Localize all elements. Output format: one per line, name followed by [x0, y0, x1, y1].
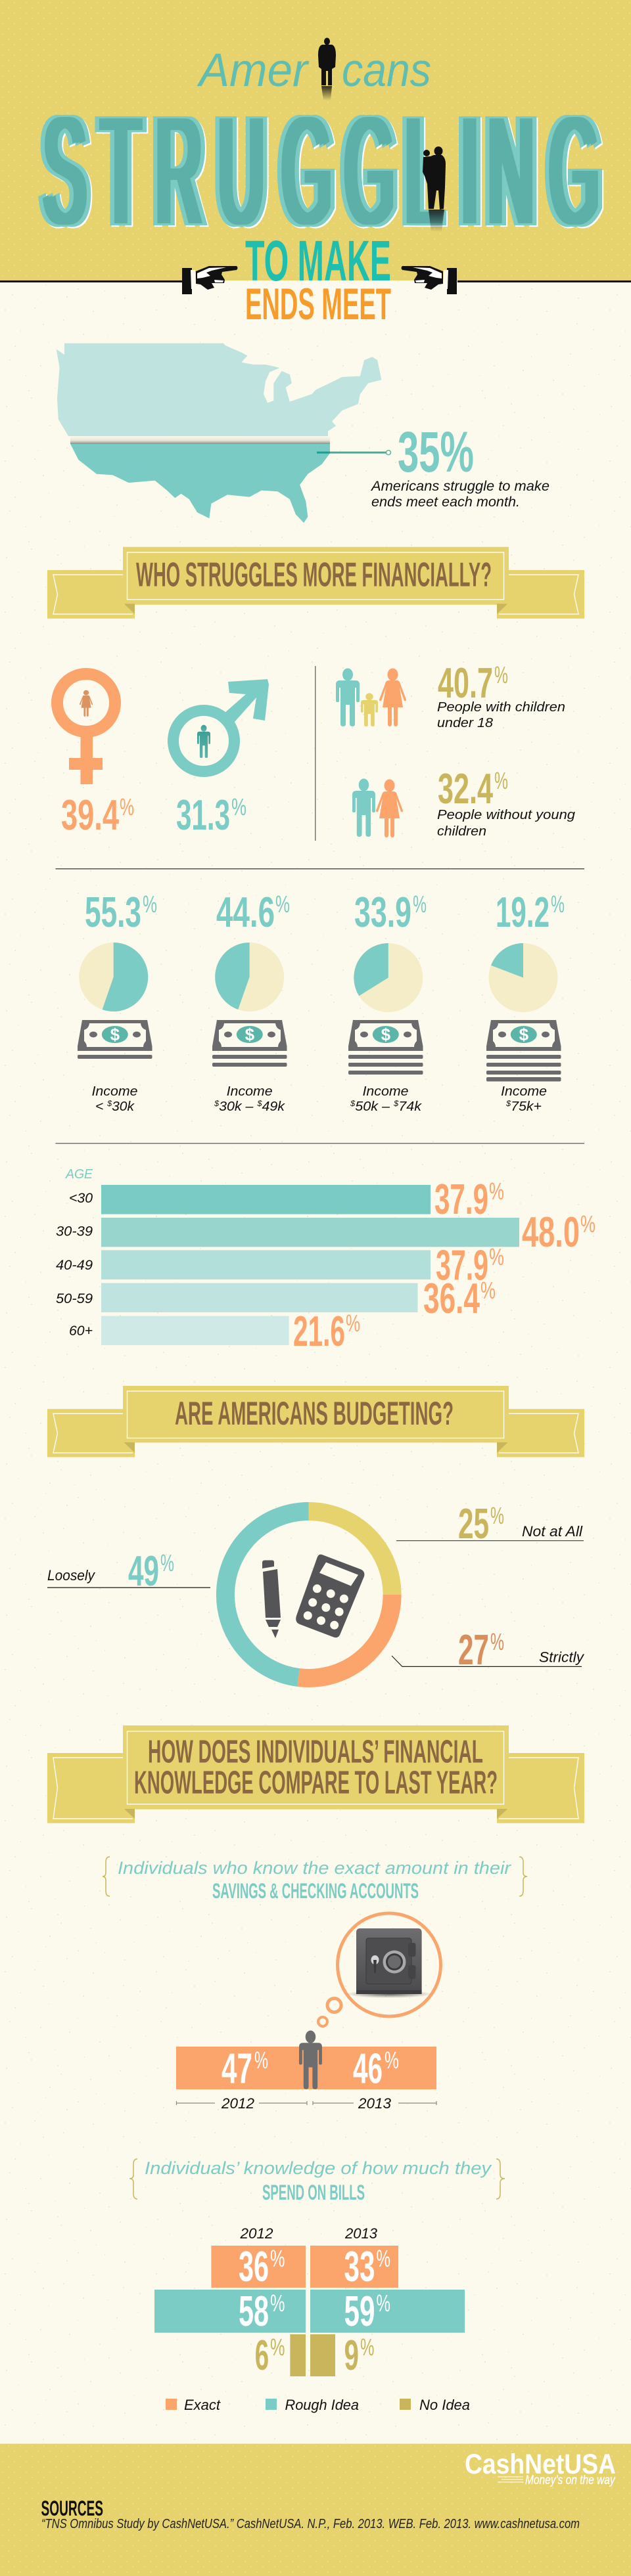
callout: strictly 27%: [392, 1626, 585, 1674]
stat: people with children 40.7%: under 18: [437, 716, 493, 730]
pie chart: [354, 943, 423, 1012]
divider line: [55, 1143, 584, 1144]
row: exact: %: [270, 2245, 285, 2272]
stat: women 39.4%: 39.4: [61, 791, 119, 839]
row: no idea: %: [270, 2334, 285, 2361]
icon: money stack: [212, 1020, 287, 1067]
icon: money stack: [486, 1020, 561, 1081]
sources: [41, 2497, 580, 2531]
title: STRUGGLING: STRUGGLING: [43, 85, 599, 256]
icon: male symbol: [174, 679, 269, 771]
label: Income: [501, 1084, 547, 1099]
bar: 30-39: 48.0: [522, 1208, 580, 1256]
row: rough idea: %: [270, 2290, 285, 2317]
title: ENDS MEET: ENDS MEET: [245, 279, 391, 329]
year labels: [239, 2225, 378, 2242]
label: $: [106, 1099, 112, 1108]
bar: 50-59: %: [480, 1277, 496, 1304]
bar: 30-39: %: [580, 1210, 596, 1237]
stat: 46%: 46: [353, 2044, 383, 2093]
bar: 30-39: [56, 1208, 596, 1256]
icon: female symbol: [57, 674, 115, 784]
banner: who struggles more financially: [47, 547, 584, 619]
icon: person: [299, 2031, 322, 2089]
bar: 60 plus: 60+: [69, 1323, 93, 1339]
label: $: [350, 1099, 356, 1108]
title: Americans: cans: [342, 45, 431, 97]
heading: spend on bills: Individuals’ knowledge of how much they: [145, 2158, 492, 2178]
heading: savings and checking: [103, 1857, 527, 1903]
row: rough idea: %: [376, 2290, 390, 2317]
label: Income: [363, 1084, 409, 1099]
stat: men 31.3%: %: [231, 793, 246, 820]
donut chart: budgeting: [225, 1511, 392, 1678]
label: 75k+: [511, 1099, 542, 1114]
icon: left pointing hand: [182, 266, 238, 294]
pie chart: [79, 943, 148, 1011]
callout: loosely 49%: [47, 1547, 210, 1595]
panel: income 50k to 74k: [348, 888, 427, 1114]
bar: 40-49: %: [489, 1243, 504, 1270]
sources: SOURCES: [41, 2497, 103, 2520]
banner: are Americans budgeting: [47, 1386, 584, 1457]
bar: 40-49: [56, 1241, 504, 1289]
stat: 19.2%: 19.2: [496, 888, 549, 936]
stat: people with children 40.7%: 40.7: [438, 659, 493, 707]
footer band: [0, 2444, 631, 2576]
stat: people without young children 32.4%: %: [494, 767, 508, 794]
stat: 47%: %: [254, 2047, 268, 2074]
row: exact: 33: [344, 2242, 375, 2290]
title: STRUGGLING: STRUGGLING: [43, 85, 599, 256]
text: Americans struggle: [370, 479, 549, 510]
stat: 55.3%: 55.3: [85, 888, 141, 936]
label: 74k: [398, 1099, 422, 1114]
chart: knowledge of bills by year: [154, 2225, 465, 2379]
bar: 40-49: 40-49: [56, 1258, 93, 1273]
title: Americans: Amer: [197, 45, 310, 97]
callout: not at all 25%: [396, 1499, 584, 1547]
bar: under 30: 37.9: [434, 1175, 488, 1223]
bar: exact amount known 2012 and 2013: [176, 2031, 436, 2093]
icon: pencil: [262, 1561, 281, 1638]
stat: men 31.3%: 31.3: [176, 791, 230, 839]
heading: spend on bills: SPEND ON BILLS: [262, 2181, 365, 2204]
icon: woman in symbol: [80, 690, 93, 717]
icon: money stack: $: [519, 1025, 529, 1044]
stat: people with children 40.7%: %: [494, 661, 508, 688]
label: $: [256, 1099, 262, 1108]
icon: man in symbol: [197, 725, 210, 758]
legend: [166, 2397, 470, 2413]
icon: right pointing hand: [401, 266, 457, 294]
row: exact: [211, 2242, 398, 2290]
callout: loosely 49%: %: [160, 1549, 174, 1576]
label: $: [393, 1099, 399, 1108]
legend: Exact: [184, 2397, 221, 2413]
title: STRUGGLING: STRUGGLING: [37, 87, 594, 257]
year labels: 2013: [344, 2225, 378, 2242]
title: STRUGGLING: STRUGGLING: [36, 85, 592, 256]
panel: income under 30k: [78, 888, 157, 1114]
title: STRUGGLING: STRUGGLING: [39, 85, 596, 256]
stat: people without young children 32.4%: 32.4: [438, 765, 493, 812]
stat: people without young children 32.4%: children: [437, 824, 486, 839]
callout: strictly 27%: %: [490, 1628, 504, 1655]
bar: under 30: <30: [69, 1191, 93, 1206]
panel: income 75k plus: [486, 888, 565, 1114]
stat: women 39.4%: %: [120, 793, 134, 820]
stat: 46%: %: [385, 2047, 399, 2074]
stat: 35%: 35%: [398, 420, 474, 484]
title: STRUGGLING: STRUGGLING: [47, 85, 603, 256]
map: upper part: [57, 344, 381, 436]
bar: 60 plus: [69, 1307, 360, 1355]
stat: 55.3%: %: [143, 891, 157, 918]
panel: income 30k to 49k: [212, 888, 290, 1114]
pie chart: [489, 943, 557, 1012]
heading: savings and checking: SAVINGS & CHECKING ACCOUNTS: [212, 1879, 419, 1903]
timeline labels: 2012 and 2013: 2013: [358, 2095, 392, 2112]
icon: money stack: [78, 1020, 152, 1059]
stat: 47%: 47: [222, 2044, 252, 2093]
header band: [0, 0, 631, 282]
callout: not at all 25%: Not at All: [522, 1523, 583, 1540]
stat: people without young children 32.4%: People without young: [437, 808, 575, 822]
label: [92, 1084, 138, 1114]
row: exact: %: [376, 2245, 390, 2272]
callout: loosely 49%: 49: [128, 1547, 159, 1595]
pie chart: [215, 943, 284, 1011]
heading: savings and checking: Individuals who know the exact amount in their: [118, 1858, 511, 1878]
label: 50k –: [355, 1099, 394, 1114]
title: STRUGGLING: STRUGGLING: [50, 85, 606, 256]
stat: 19.2%: %: [551, 891, 565, 918]
legend: Rough Idea: [285, 2397, 359, 2413]
icon: calculator: [296, 1555, 364, 1637]
banner: financial knowledge: [47, 1725, 584, 1823]
icon: money stack: $: [245, 1025, 255, 1044]
text: Americans struggle: Americans struggle to make: [370, 479, 549, 494]
icon: thought bubble with safe: [318, 1913, 440, 2026]
icon: money stack: $: [381, 1025, 391, 1044]
stat: 33.9%: 33.9: [354, 888, 411, 936]
callout: strictly 27%: 27: [458, 1626, 489, 1674]
icon: safe: [346, 1928, 432, 1998]
callout: not at all 25%: 25: [458, 1499, 489, 1547]
legend: No Idea: [419, 2397, 470, 2413]
bar: 50-59: 36.4: [423, 1274, 480, 1322]
heading: spend on bills: [129, 2158, 505, 2204]
label: Income: [227, 1084, 273, 1099]
bar: 60 plus: 21.6: [293, 1307, 345, 1355]
bar: 50-59: [56, 1274, 496, 1322]
stat: people with children 40.7%: People with children: [437, 700, 565, 715]
timeline labels: 2012 and 2013: [176, 2095, 436, 2112]
callout: loosely 49%: Loosely: [47, 1567, 96, 1584]
icon: man silhouette as the letter i: [318, 38, 336, 100]
row: rough idea: 59: [344, 2287, 375, 2335]
title: STRUGGLING: STRUGGLING: [51, 87, 607, 257]
row: no idea: 6: [255, 2331, 269, 2379]
label: Income: [92, 1084, 138, 1099]
row: no idea: 9: [344, 2331, 359, 2379]
row: no idea: [255, 2331, 375, 2379]
bar: 50-59: 50-59: [56, 1291, 93, 1306]
stat: people without young children 32.4%: [437, 765, 575, 839]
stat: 33.9%: %: [413, 891, 427, 918]
map: lower part: [70, 444, 330, 523]
bar chart: age: [56, 1167, 596, 1355]
label: <: [95, 1099, 103, 1114]
label: $: [214, 1099, 219, 1108]
icon: money stack: [348, 1020, 423, 1075]
label: 30k –: [219, 1099, 257, 1114]
label: [501, 1084, 547, 1114]
title: Americans: [197, 38, 431, 100]
row: exact: 36: [239, 2242, 269, 2290]
label: $: [505, 1099, 511, 1108]
timeline labels: 2012 and 2013: 2012: [221, 2095, 254, 2112]
callout: not at all 25%: %: [490, 1502, 504, 1529]
divider line: [55, 868, 584, 870]
icon: parent holding child silhouette: [423, 146, 446, 232]
row: rough idea: [154, 2287, 465, 2335]
panel: map of United States: [57, 344, 390, 523]
stat: 44.6%: 44.6: [216, 888, 275, 936]
text: Americans struggle: ends meet each month.: [371, 495, 520, 510]
label: [214, 1084, 285, 1114]
row: no idea: %: [360, 2334, 375, 2361]
vertical divider: [315, 666, 316, 841]
stat: 44.6%: %: [275, 891, 290, 918]
icon: family with child: [336, 669, 406, 726]
title: TO MAKE: TO MAKE: [245, 229, 391, 293]
leader line: [317, 451, 390, 455]
bar: under 30: %: [489, 1178, 504, 1205]
map: shadow strip: [70, 436, 330, 444]
label: [350, 1084, 422, 1114]
icon: couple: [352, 779, 403, 837]
label: 49k: [262, 1099, 285, 1114]
bar: 40-49: 37.9: [436, 1241, 488, 1289]
axis label: AGE: AGE: [65, 1167, 93, 1182]
year labels: 2012: [239, 2225, 273, 2242]
callout: strictly 27%: Strictly: [539, 1649, 585, 1666]
icon: money stack: $: [110, 1025, 120, 1044]
bar: 30-39: 30-39: [56, 1224, 93, 1239]
row: rough idea: 58: [239, 2287, 269, 2335]
bar: 60 plus: %: [346, 1310, 360, 1337]
stat: people with children 40.7%: [437, 659, 565, 730]
label: 30k: [112, 1099, 135, 1114]
bar: under 30: [69, 1175, 504, 1223]
